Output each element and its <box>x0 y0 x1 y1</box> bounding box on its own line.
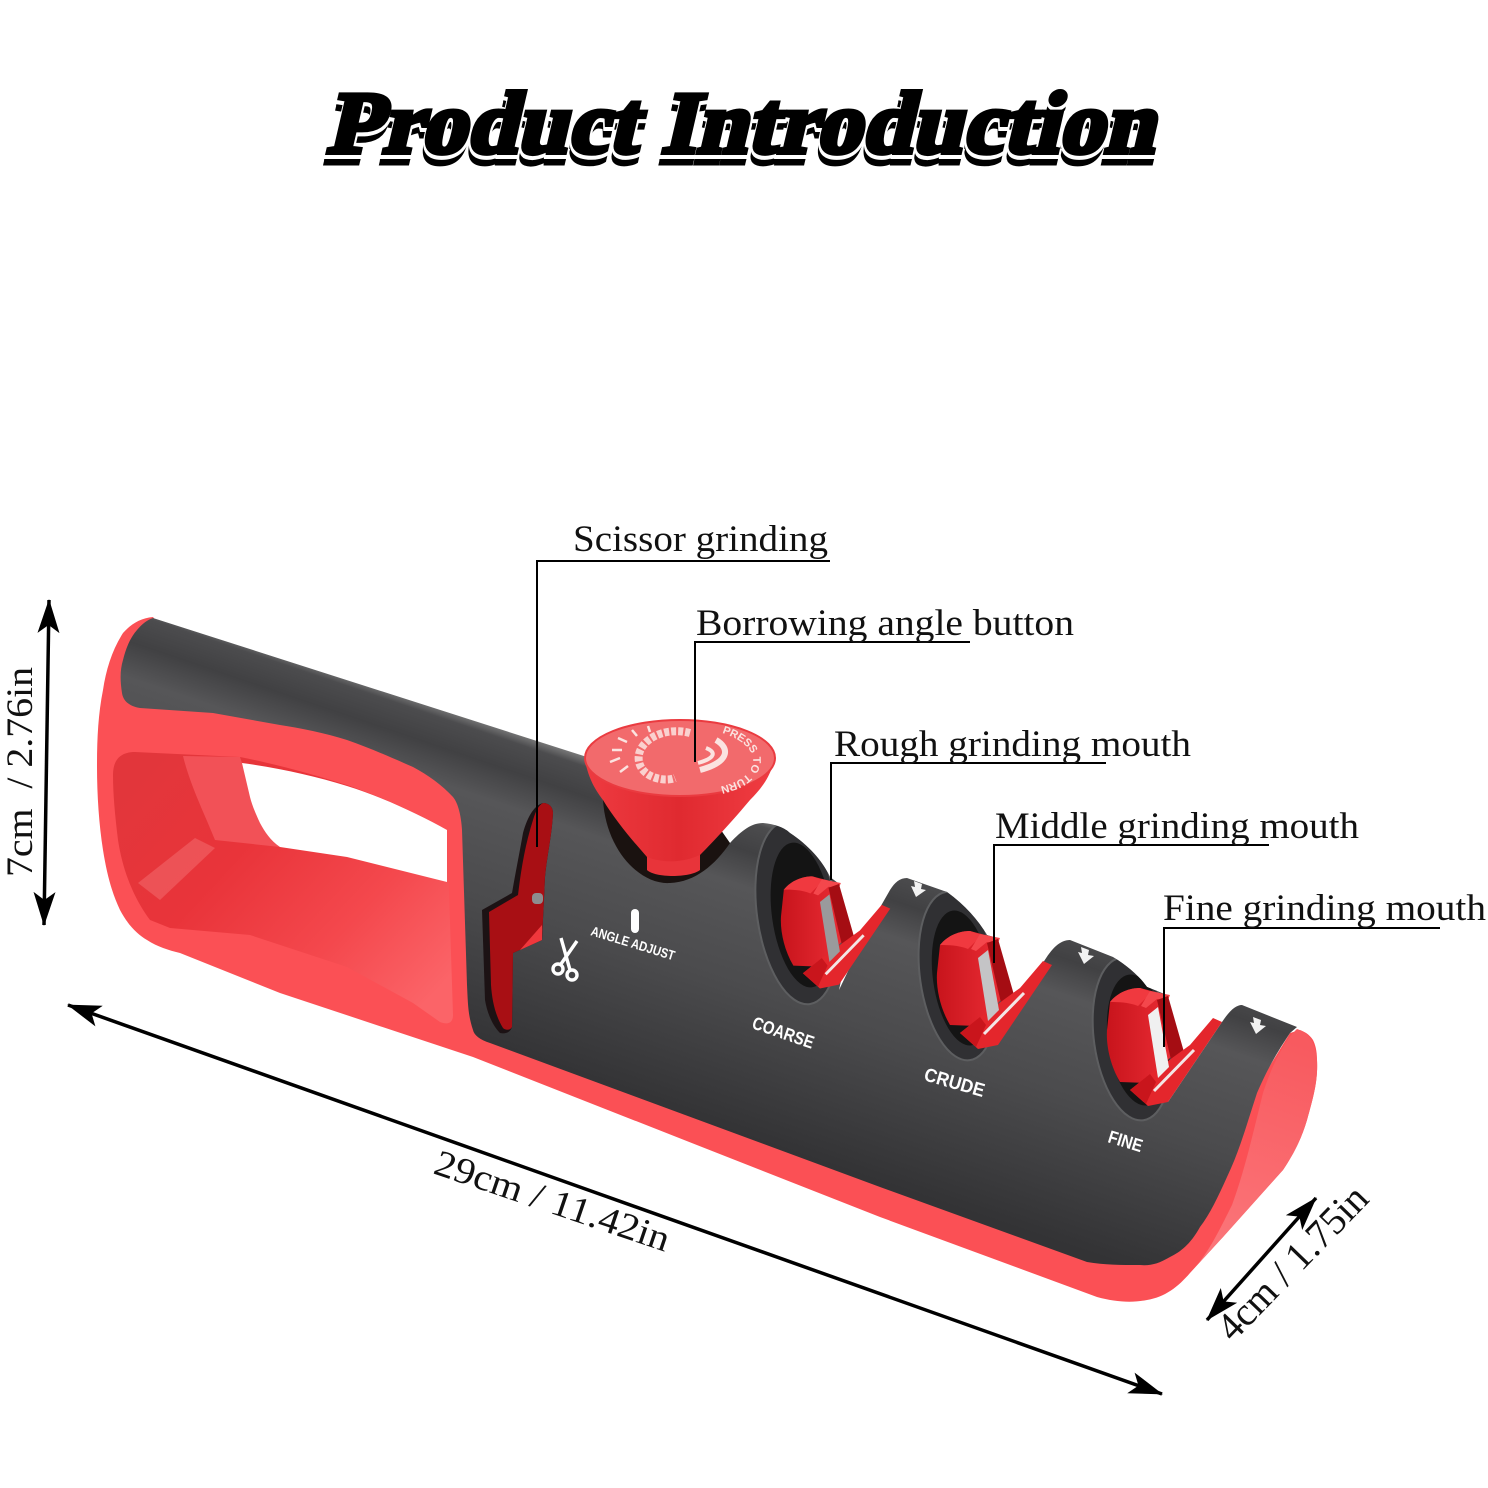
product: knife sharpener <box>97 617 1318 1302</box>
callout: scissor grinding: Scissor grinding <box>573 519 828 560</box>
handle lower highlight <box>138 838 215 900</box>
crude label: CRUDE <box>922 1065 987 1102</box>
fine label: FINE <box>1106 1127 1145 1156</box>
title: Product Introduction <box>321 76 1172 172</box>
middle grinding mouth <box>937 931 1052 1049</box>
dimension: width: 4cm / 1.75in <box>1207 1176 1377 1349</box>
handle recess side facet <box>183 756 280 847</box>
angle adjust label <box>589 909 677 963</box>
dimension: length <box>68 1005 1162 1394</box>
callout: borrowing angle button: Borrowing angle button <box>696 603 1074 644</box>
callout: fine grinding mouth: Fine grinding mouth <box>1163 888 1487 929</box>
red outer shell <box>97 617 1317 1302</box>
angle knob: PRESS TO TURN <box>721 726 761 794</box>
fine grinding mouth <box>1107 988 1222 1106</box>
callout: middle grinding mouth <box>994 806 1360 963</box>
dimension: length: 29cm / 11.42in <box>429 1143 675 1260</box>
grey body <box>121 618 1297 1265</box>
callout: rough grinding mouth <box>831 724 1192 880</box>
coarse grinding mouth <box>781 876 890 988</box>
end cap facet <box>1197 1029 1317 1265</box>
title: Product Introduction <box>321 78 1172 175</box>
callout: scissor grinding <box>537 519 830 847</box>
mouth rings <box>745 816 1181 1125</box>
callout: rough grinding mouth: Rough grinding mouth <box>834 724 1192 765</box>
callout: borrowing angle button <box>695 603 1074 762</box>
ridge arrows <box>911 881 1266 1034</box>
icon: scissors <box>553 938 577 980</box>
handle inner recess <box>113 752 453 1023</box>
scissor slot <box>482 803 553 1033</box>
coarse label: COARSE <box>750 1013 817 1053</box>
dimension: height <box>0 600 49 925</box>
dimension: height: 7cm / 2.76in <box>0 667 41 877</box>
handle opening <box>242 763 447 882</box>
title: Product Introduction <box>319 86 1170 183</box>
angle adjust label: ANGLE ADJUST <box>589 924 677 963</box>
angle knob <box>584 719 776 884</box>
title: Product Introduction <box>320 81 1171 178</box>
knob dial marks <box>610 726 725 779</box>
callout: fine grinding mouth <box>1163 888 1487 1047</box>
callout: middle grinding mouth: Middle grinding mouth <box>995 806 1360 847</box>
